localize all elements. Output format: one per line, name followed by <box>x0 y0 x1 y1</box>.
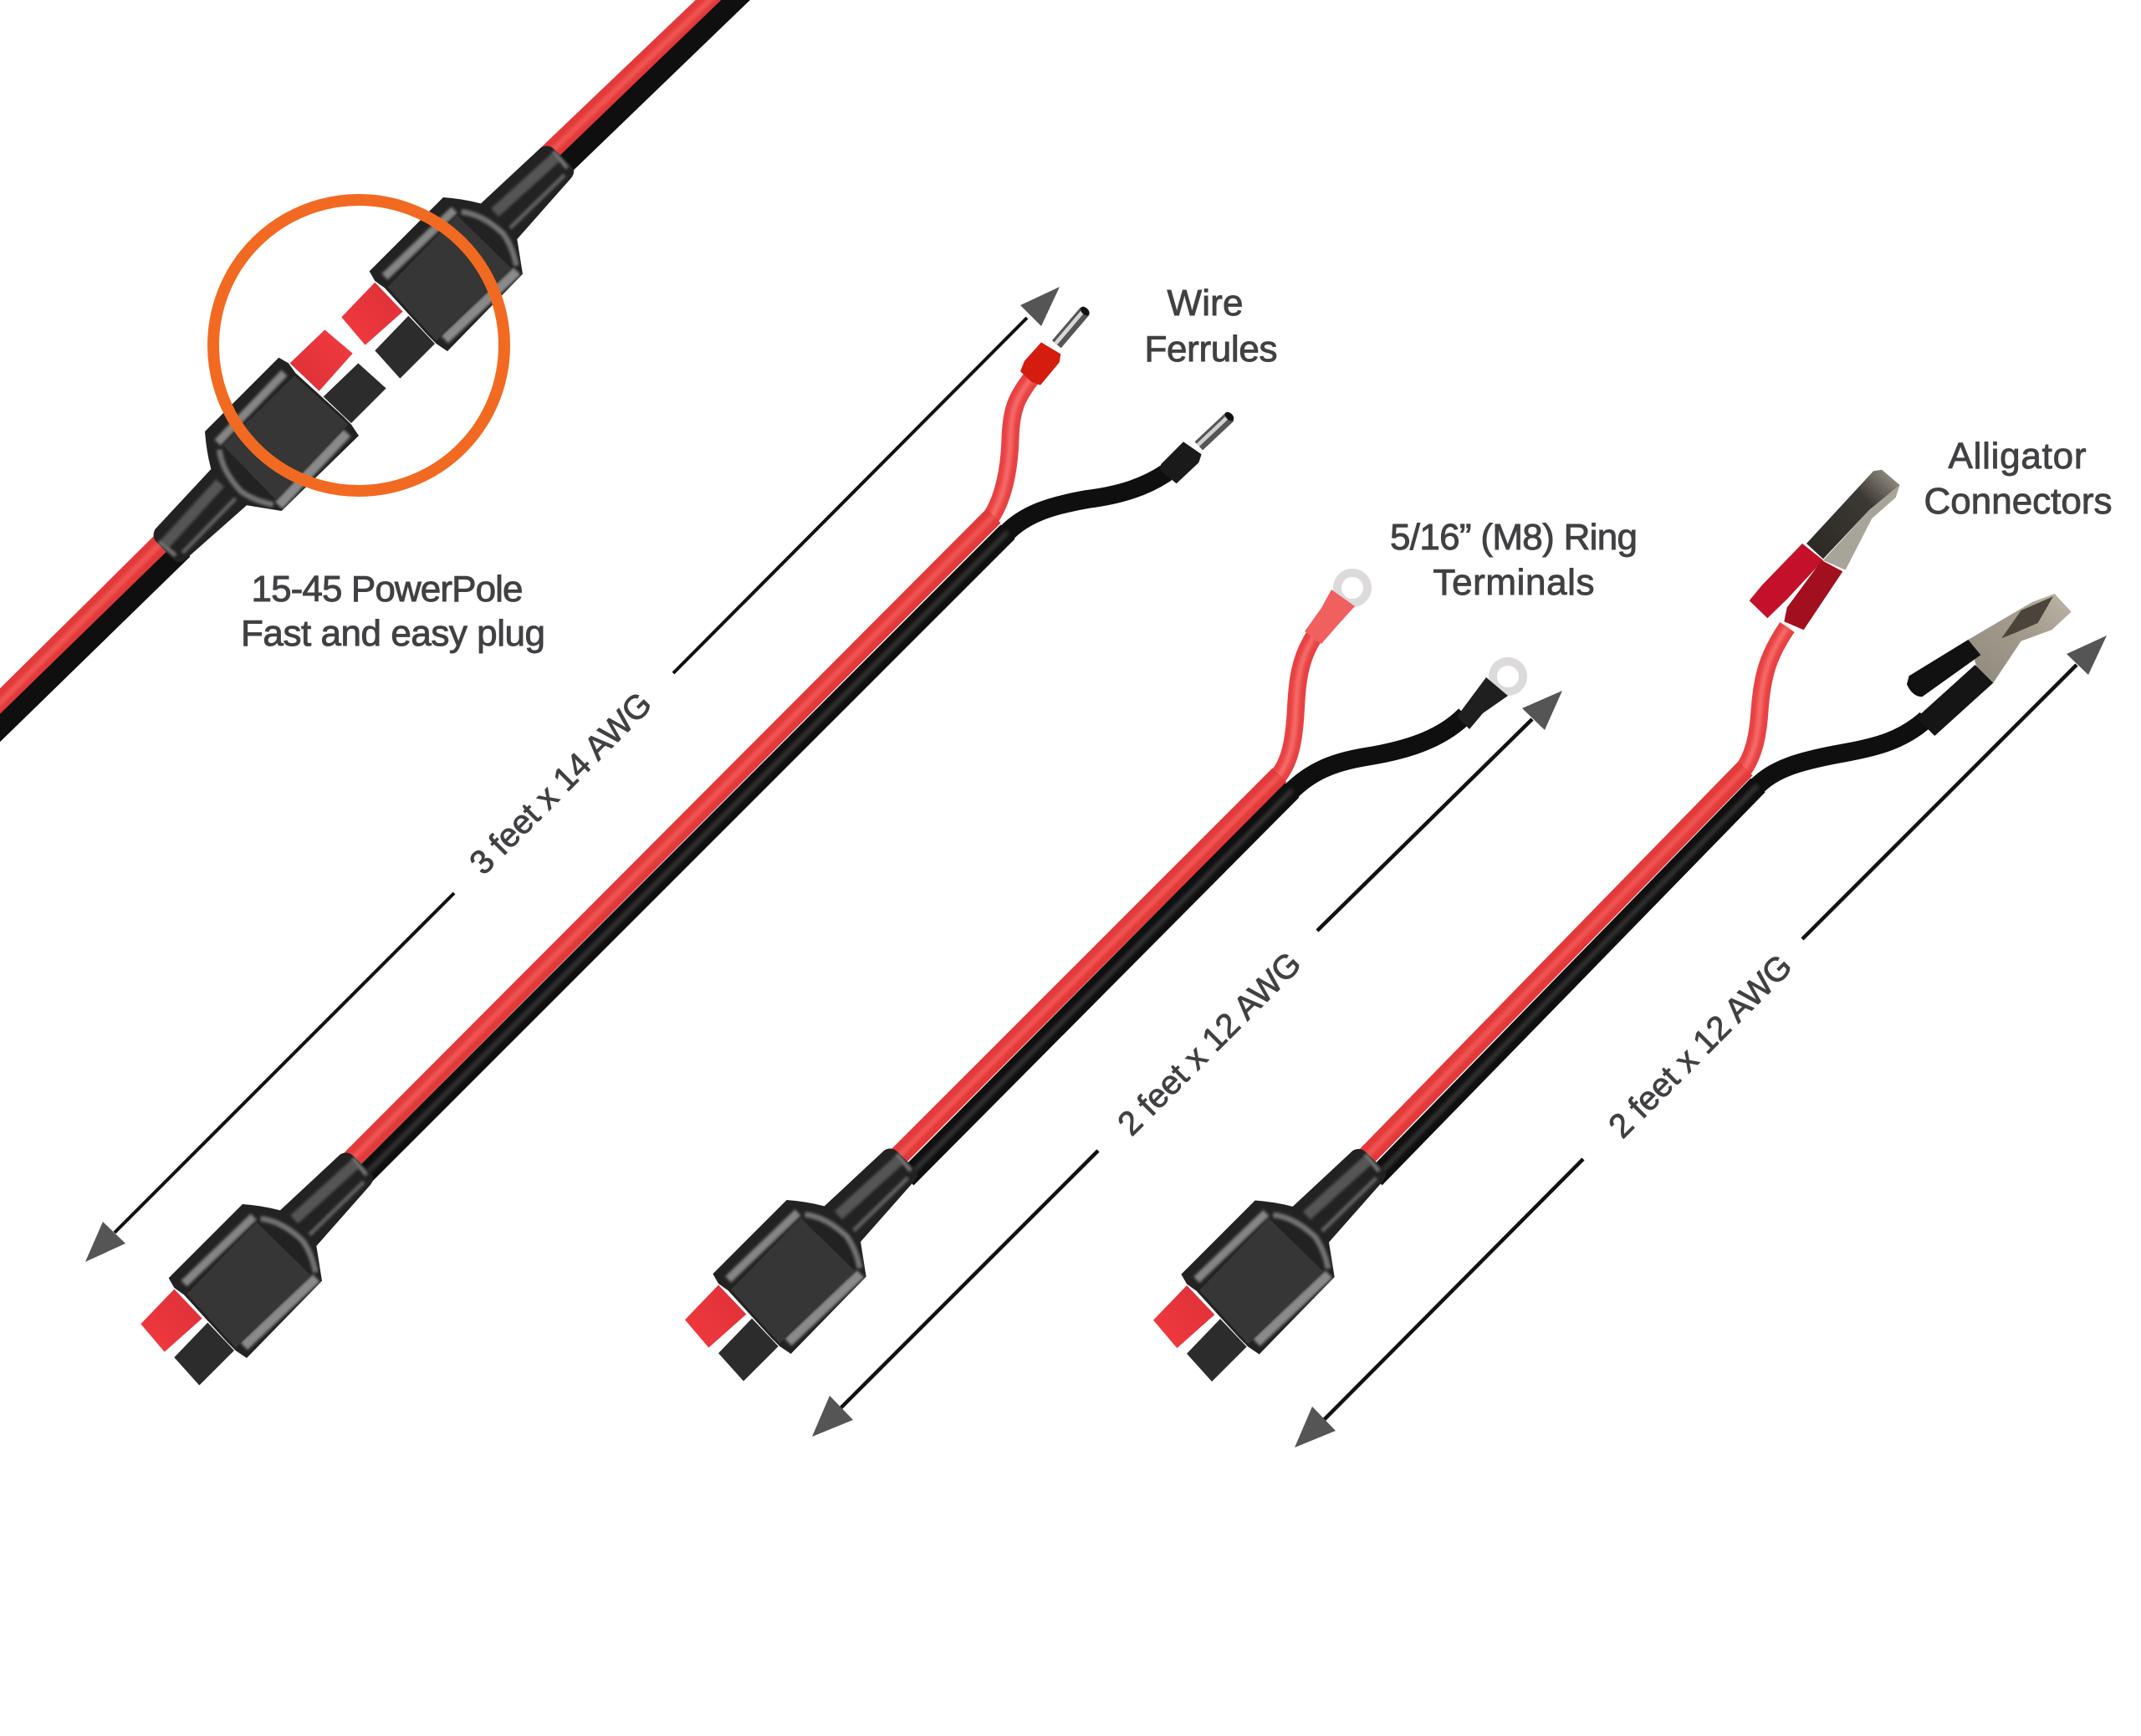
label: Alligator Connectors <box>1924 436 2113 522</box>
cable 1: wire ferrules <box>141 305 1235 1386</box>
black ring terminal <box>1457 661 1523 729</box>
lower jaw <box>1823 485 1900 570</box>
top PowerPole plug, lower half <box>154 329 386 562</box>
label: PowerPole: Fast and easy plug <box>241 613 545 654</box>
label: Wire Ferrules: Wire <box>1168 283 1243 324</box>
label: 2 feet x 12 AWG, cable 2: 2 feet x 12 AWG <box>1111 945 1308 1142</box>
black wire <box>907 715 1465 1178</box>
label: PowerPole: 15-45 PowerPole <box>251 569 524 610</box>
label: 3 feet x 14 AWG: 3 feet x 14 AWG <box>462 686 659 881</box>
top cable: lower wire pair <box>0 535 183 744</box>
label: 2 feet x 12 AWG, cable 3: 2 feet x 12 AWG <box>1602 947 1799 1145</box>
label: Wire Ferrules <box>1144 283 1278 370</box>
label: Ring Terminals: Terminals <box>1433 562 1594 603</box>
red ring terminal <box>1305 573 1367 644</box>
plug <box>685 1149 917 1381</box>
upper sleeve <box>1750 544 1823 618</box>
top PowerPole plug, upper half <box>341 146 574 379</box>
label: Ring Terminals <box>1390 517 1638 603</box>
red wire <box>1360 627 1787 1163</box>
arrow: 3 feet length <box>85 287 1060 1262</box>
upper sleeve <box>1907 640 1980 697</box>
lower sleeve <box>1784 560 1842 630</box>
label: Ring Terminals: 5/16” (M8) Ring <box>1390 517 1638 558</box>
black alligator clip <box>1907 594 2072 736</box>
lower sleeve <box>1917 665 1993 736</box>
label: Wire Ferrules: Ferrules <box>1144 329 1278 370</box>
plug <box>1153 1149 1386 1381</box>
label: Alligator Connectors: Connectors <box>1924 481 2113 522</box>
metal jaws <box>1968 594 2072 683</box>
orange highlight circle <box>213 200 504 491</box>
upper jaw <box>1806 470 1900 559</box>
jaw gap <box>2001 596 2053 638</box>
top cable: upper wire pair <box>545 0 744 171</box>
red ferrule <box>1020 305 1091 385</box>
black ferrule <box>1160 411 1235 483</box>
arrow: 2 feet length, cable 3 <box>1295 636 2107 1448</box>
plug <box>141 1153 373 1386</box>
red wire <box>346 376 1033 1165</box>
cable 2: ring terminals <box>685 573 1523 1381</box>
black wire <box>1375 719 1926 1178</box>
label: Alligator Connectors: Alligator <box>1949 436 2086 477</box>
red alligator clip <box>1750 470 1900 630</box>
arrow: 2 feet length, cable 2 <box>812 691 1562 1437</box>
label: PowerPole <box>241 569 545 654</box>
black wire <box>360 472 1167 1179</box>
red wire <box>892 636 1315 1163</box>
cable 3: alligator connectors <box>1153 470 2072 1381</box>
